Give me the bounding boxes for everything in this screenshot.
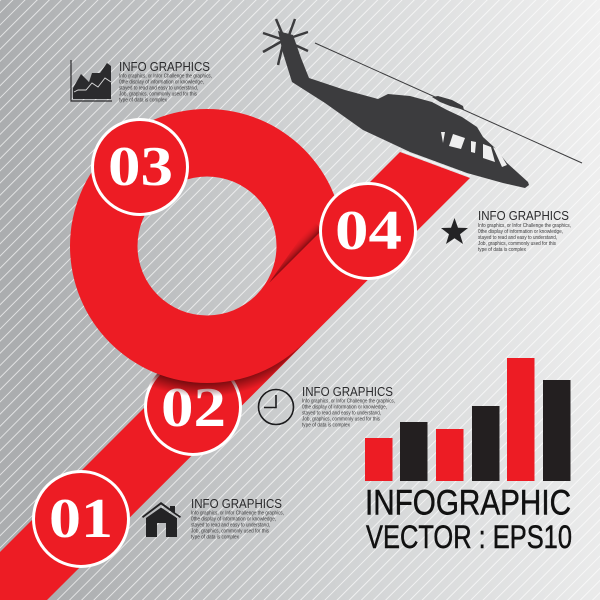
text block: middle: Job, graphics, commonly used for this bbox=[302, 416, 380, 422]
text block: top left: 0the display of information or knowledge, bbox=[119, 80, 204, 86]
text block: middle: type of data is complex bbox=[302, 422, 350, 428]
rotor hub bbox=[432, 96, 464, 110]
title bbox=[365, 484, 572, 555]
number badge 04 bbox=[320, 184, 416, 278]
number badge 02: 02 bbox=[161, 377, 226, 439]
tail rotor bbox=[263, 19, 308, 65]
icon: area chart bbox=[71, 60, 112, 101]
text block: middle: 0the display of information or knowledge, bbox=[302, 404, 387, 410]
text block: right: Job, graphics, commonly used for this bbox=[478, 241, 556, 247]
text block: bottom bbox=[191, 497, 284, 540]
icon: star bbox=[441, 218, 468, 244]
text block: right: type of data is complex bbox=[478, 247, 526, 253]
text block: top left: Job, graphics, commonly used for this bbox=[119, 92, 197, 98]
text block: middle: Info graphics, or Infor Challenge the graphics, bbox=[302, 398, 395, 404]
number badge 02 bbox=[146, 360, 240, 454]
red diagonal ribbon bbox=[0, 152, 470, 600]
text block: right: 0the display of information or knowledge, bbox=[478, 229, 563, 235]
text block: right: INFO GRAPHICS bbox=[478, 209, 569, 223]
number badge 01: 01 bbox=[49, 488, 113, 550]
text block: top left: stayed to read and easy to understand, bbox=[119, 86, 198, 92]
text block: bottom: Job, graphics, commonly used for this bbox=[191, 528, 269, 534]
number badge 03: 03 bbox=[108, 136, 173, 198]
text block: bottom: stayed to read and easy to understand, bbox=[191, 522, 270, 528]
text block: top left bbox=[119, 60, 212, 104]
text block: right: stayed to read and easy to understand, bbox=[478, 235, 557, 241]
number badge 03 bbox=[92, 120, 188, 214]
windows bbox=[441, 132, 507, 167]
red ring bbox=[70, 109, 344, 383]
helicopter body bbox=[278, 31, 529, 188]
text block: middle bbox=[302, 385, 395, 428]
number badge 01 bbox=[34, 472, 128, 566]
ring shadow on ribbon bbox=[149, 342, 305, 396]
text block: top left: INFO GRAPHICS bbox=[119, 60, 210, 74]
text block: bottom: type of data is complex bbox=[191, 534, 239, 540]
text block: bottom: INFO GRAPHICS bbox=[191, 497, 282, 511]
main rotor blade bbox=[315, 43, 582, 163]
text block: middle: INFO GRAPHICS bbox=[302, 385, 393, 399]
text block: right: Info graphics, or Infor Challenge the graphics, bbox=[478, 223, 571, 229]
text block: right bbox=[478, 209, 571, 253]
ribbon fold shadow over ring bbox=[269, 220, 322, 283]
helicopter bbox=[263, 19, 582, 188]
text block: top left: Info graphics, or Infor Challenge the graphics, bbox=[119, 74, 212, 80]
belly highlight bbox=[402, 151, 470, 176]
icon: clock bbox=[258, 390, 294, 424]
icon: house bbox=[142, 502, 181, 537]
bar chart bbox=[365, 358, 570, 481]
number badge 04: 04 bbox=[335, 200, 402, 262]
text block: top left: type of data is complex bbox=[119, 98, 167, 104]
text block: middle: stayed to read and easy to understand, bbox=[302, 410, 381, 416]
text block: bottom: 0the display of information or knowledge, bbox=[191, 516, 276, 522]
text block: bottom: Info graphics, or Infor Challenge the graphics, bbox=[191, 510, 284, 516]
